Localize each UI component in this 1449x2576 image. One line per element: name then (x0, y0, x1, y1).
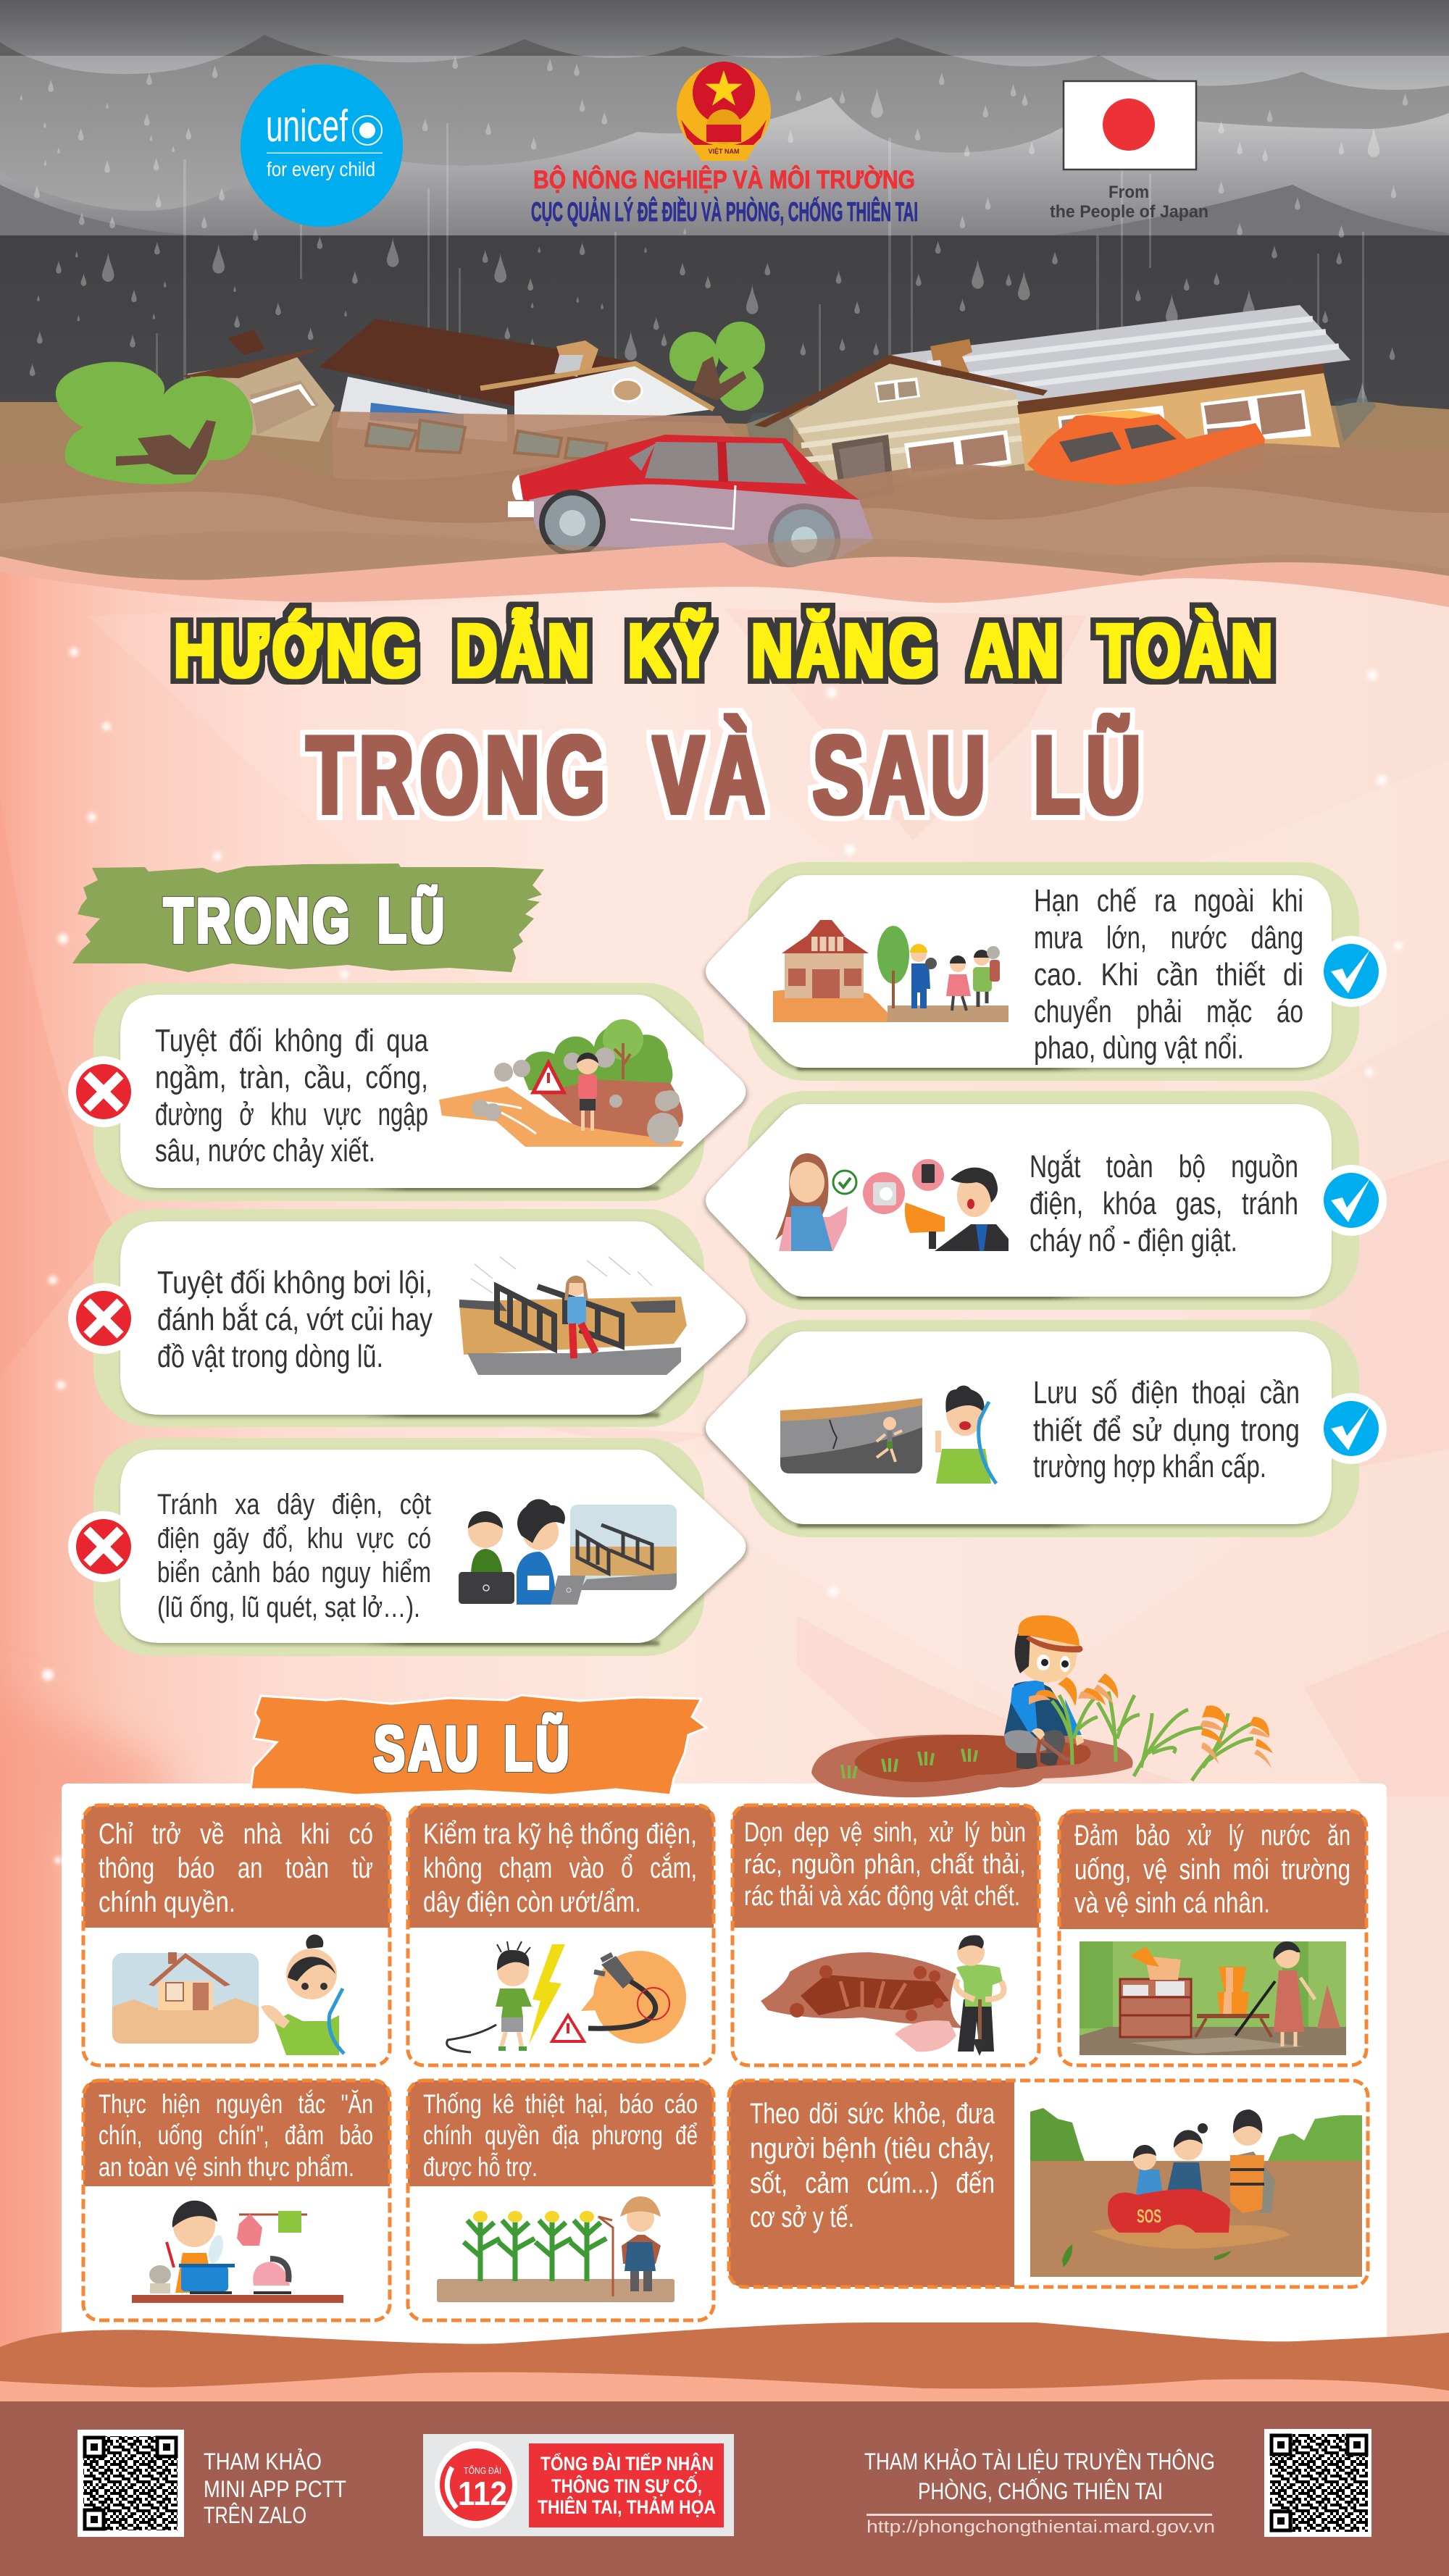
card text (1074, 1820, 1350, 1919)
footer (0, 2401, 1449, 2576)
card text (99, 2089, 373, 2182)
text block: thiết để sử dụng trong (1033, 1413, 1300, 1448)
card text: Thực hiện nguyên tắc "Ăn (99, 2089, 373, 2119)
text block: Tuyệt đối không bơi lội, (157, 1265, 433, 1300)
text block: Ngắt toàn bộ nguồn (1030, 1149, 1298, 1184)
illustration (112, 1934, 344, 2055)
reference text right: http://phongchongthientai.mard.gov.vn (867, 2517, 1215, 2537)
text block: trường hợp khẩn cấp. (1033, 1449, 1266, 1484)
card text: chính quyền. (99, 1886, 235, 1918)
text block: đường ở khu vực ngập (155, 1097, 428, 1132)
illustration: flooded road (439, 1019, 684, 1147)
house A (180, 330, 335, 442)
hotline 112: TỔNG ĐÀI (464, 2465, 501, 2476)
rain behind flood (20, 56, 1408, 485)
flood scene (0, 305, 1449, 594)
text block: ngầm, tràn, cầu, cống, (155, 1060, 428, 1095)
water layer 2 (0, 487, 1449, 580)
card text: Kiểm tra kỹ hệ thống điện, (423, 1818, 697, 1850)
text block: Lưu số điện thoại cần (1033, 1375, 1300, 1410)
illustration: house and evacuating people (773, 920, 1009, 1022)
icon: red X (68, 1283, 139, 1354)
header sky (0, 0, 1449, 594)
text block: biển cảnh báo nguy hiểm (157, 1557, 431, 1589)
logo: Japan flag: the People of Japan (1050, 202, 1208, 222)
text block (155, 1023, 428, 1168)
QR code right (1264, 2429, 1371, 2537)
illustration (132, 2201, 343, 2303)
card text: an toàn vệ sinh thực phẩm. (99, 2152, 354, 2182)
text block: phao, dùng vật nổi. (1034, 1030, 1244, 1066)
text block (1034, 883, 1303, 1066)
house D (754, 305, 1350, 503)
text block: chuyển phải mặc áo (1034, 994, 1303, 1029)
text block: điện gãy đổ, khu vực có (157, 1523, 431, 1555)
card text: Theo dõi sức khỏe, đưa (750, 2098, 995, 2130)
house B lower under water (333, 411, 753, 500)
logo: unicef: for every child (267, 158, 375, 180)
card text (423, 1818, 697, 1918)
card F: report damage (408, 2081, 714, 2320)
icon: national emblem: VIỆT NAM (708, 147, 740, 155)
illustration: farmer in rice field (811, 1615, 1273, 1797)
illustration (437, 2196, 675, 2302)
card text: thông báo an toàn từ (99, 1852, 373, 1884)
card text (99, 1818, 373, 1918)
card text: rác, nguồn phân, chất thải, (744, 1849, 1026, 1880)
panel: right card 1 (706, 862, 1387, 1081)
hotline 112: TỔNG ĐÀI TIẾP NHẬN (540, 2452, 714, 2475)
card text: sốt, cảm cúm...) đến (750, 2167, 995, 2199)
panel: right card 2 (706, 1091, 1387, 1310)
reference text right: PHÒNG, CHỐNG THIÊN TAI (918, 2478, 1163, 2504)
icon: national emblem (677, 62, 771, 161)
text block: Tránh xa dây điện, cột (157, 1489, 431, 1521)
text block: điện, khóa gas, tránh (1030, 1186, 1298, 1221)
red car (508, 435, 873, 576)
card text: và vệ sinh cá nhân. (1074, 1887, 1270, 1919)
card text: Đảm bảo xử lý nước ăn (1074, 1820, 1350, 1852)
text block: Hạn chế ra ngoài khi (1034, 883, 1303, 919)
illustration: children and laptop (459, 1499, 677, 1605)
bottom wave (0, 2322, 1449, 2401)
reference text right: THAM KHẢO TÀI LIỆU TRUYỀN THÔNG (864, 2449, 1215, 2475)
hotline 112: 112 (458, 2475, 507, 2512)
banner: SAU LŨ: SAU LŨ (374, 1713, 572, 1784)
card text: uống, vệ sinh môi trường (1074, 1854, 1350, 1886)
card text (750, 2098, 995, 2233)
text block: (lũ ống, lũ quét, sạt lở…). (157, 1592, 420, 1623)
ministry name: BỘ NÔNG NGHIỆP VÀ MÔI TRƯỜNG (533, 165, 915, 194)
card text: chín, uống chín", đảm bảo (99, 2120, 373, 2150)
illustration (447, 1941, 686, 2052)
illustration (761, 1935, 1004, 2056)
logo: Japan flag: From (1108, 183, 1149, 202)
text block: đồ vật trong dòng lũ. (157, 1339, 383, 1374)
illustration: SOS (1137, 2205, 1161, 2227)
card C: cleaning (732, 1805, 1039, 2065)
text block (1030, 1149, 1298, 1258)
card text: cơ sở y tế. (750, 2201, 854, 2233)
water layer (0, 443, 1449, 580)
card A: return home (83, 1805, 390, 2065)
panel: left card 2 (68, 1209, 746, 1427)
banner: SAU LŨ (251, 1695, 706, 1795)
logo: unicef (241, 64, 403, 227)
hotline 112: THÔNG TIN SỰ CỐ, (551, 2474, 702, 2497)
text block (1033, 1375, 1300, 1484)
card D: water and sanitation (1059, 1811, 1366, 2065)
reference text right (864, 2449, 1215, 2537)
card text: Dọn dẹp vệ sinh, xử lý bùn (744, 1818, 1026, 1848)
illustration (1080, 1941, 1346, 2055)
house C (480, 340, 714, 435)
hotline 112: THIÊN TAI, THẢM HỌA (538, 2495, 716, 2518)
reference text left: MINI APP PCTT (204, 2476, 346, 2502)
hotline 112 (423, 2434, 734, 2536)
back water (0, 402, 1449, 522)
card text: chính quyền địa phương để (423, 2120, 698, 2150)
icon: red X (68, 1511, 139, 1582)
department name: CỤC QUẢN LÝ ĐÊ ĐIỀU VÀ PHÒNG, CHỐNG THIÊN TAI (531, 196, 918, 227)
panel: left card 1 (68, 983, 746, 1201)
reference text left: TRÊN ZALO (204, 2502, 306, 2528)
icon: blue tick (1316, 936, 1387, 1007)
text block: sâu, nước chảy xiết. (155, 1133, 375, 1168)
card text (744, 1818, 1026, 1912)
icon: blue tick (1316, 1165, 1387, 1236)
water layer 3 (0, 531, 1449, 594)
panel: right card 3 (706, 1320, 1387, 1537)
card B: electricity (408, 1805, 714, 2065)
card text: người bệnh (tiêu chảy, (750, 2133, 995, 2165)
card text (423, 2089, 698, 2182)
banner: TRONG LŨ (72, 863, 544, 972)
illustration: woman, socket and man with megaphone (775, 1153, 1009, 1251)
card text: được hỗ trợ. (423, 2152, 538, 2182)
illustration (1030, 2108, 1362, 2277)
logo: unicef: unicef (266, 101, 348, 151)
illustration: cracked dam and woman calling (780, 1386, 996, 1484)
card text: dây điện còn ướt/ẩm. (423, 1886, 641, 1918)
text block (157, 1489, 431, 1623)
text block: Tuyệt đối không đi qua (155, 1023, 428, 1058)
orange car (1027, 410, 1265, 485)
illustration: flooded bridge (459, 1257, 687, 1375)
tree 2 (669, 322, 765, 411)
logo: Japan flag (1050, 81, 1208, 222)
panel: white SAU LŨ board (62, 1783, 1387, 2349)
house B (319, 319, 638, 442)
icon: blue tick (1316, 1393, 1387, 1464)
sparkles (42, 648, 1403, 1864)
panel: left card 3 (68, 1438, 746, 1656)
card text: Chỉ trở về nhà khi có (99, 1818, 373, 1850)
icon: red X (68, 1056, 139, 1127)
text block: cao. Khi cần thiết di (1034, 957, 1303, 992)
text block: mưa lớn, nước dâng (1034, 920, 1303, 955)
card text: Thống kê thiệt hại, báo cáo (423, 2089, 698, 2119)
card E: food hygiene (83, 2081, 390, 2320)
text block (157, 1265, 433, 1374)
QR code left (78, 2430, 184, 2537)
reference text left: THAM KHẢO (204, 2449, 322, 2475)
card text: không chạm vào ổ cắm, (423, 1852, 697, 1884)
page background (0, 543, 1449, 2576)
card text: rác thải và xác động vật chết. (744, 1881, 1020, 1912)
logo: Vietnam ministry (531, 62, 918, 227)
reference text left (204, 2449, 346, 2528)
tree 1 (56, 362, 253, 484)
card G: health monitoring (729, 2081, 1368, 2287)
banner: TRONG LŨ: TRONG LŨ (164, 885, 448, 956)
text block: cháy nổ - điện giật. (1030, 1223, 1237, 1258)
text block: đánh bắt cá, vớt củi hay (157, 1302, 433, 1337)
